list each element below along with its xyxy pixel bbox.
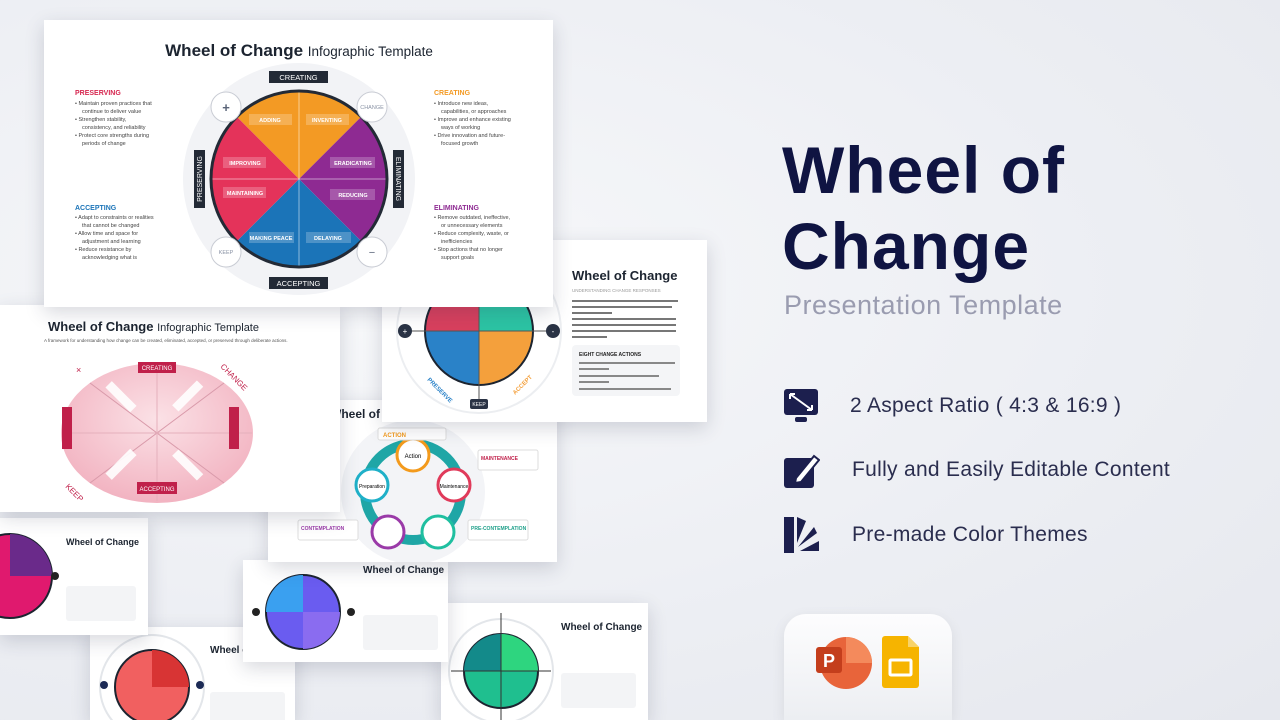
- quadrant wheel: +: [403, 327, 408, 336]
- text block: accepting: • Adapt to constraints or realities: [75, 215, 154, 221]
- text block: preserving: continue to deliver value: [82, 109, 141, 115]
- cycle diagram: Preparation: [359, 484, 385, 490]
- text block: eliminating: inefficiencies: [441, 239, 473, 245]
- pink wheel: CREATING: [142, 366, 173, 372]
- slide: stages of change cycle: Wheel of Change: [330, 407, 428, 421]
- wheel: IMPROVING: [229, 161, 261, 167]
- wheel: ADDING: [259, 118, 281, 124]
- slide: stages of change cycle: [268, 400, 557, 562]
- wheel: green: [449, 613, 553, 720]
- text block: accepting: • Allow time and space for: [75, 231, 138, 237]
- description: Wheel of Change: [572, 268, 677, 283]
- text block: accepting: [75, 205, 154, 261]
- icon: swatches: [784, 517, 819, 553]
- feature: editable: Fully and Easily Editable Content: [852, 458, 1170, 481]
- wheel: ERADICATING: [334, 161, 372, 167]
- wheel: blue: [252, 575, 355, 649]
- text block: preserving: PRESERVING: [75, 90, 121, 97]
- wheel: CHANGE: [360, 105, 384, 111]
- description: UNDERSTANDING CHANGE RESPONSES: [572, 288, 661, 293]
- title: Wheel of Change Infographic Template: [48, 319, 259, 334]
- text block: accepting: ACCEPTING: [75, 205, 117, 212]
- cycle diagram: [341, 420, 485, 564]
- text block: preserving: [75, 90, 152, 147]
- text block: eliminating: support goals: [441, 255, 474, 261]
- wheel: DELAYING: [314, 236, 342, 242]
- wheel: ELIMINATING: [394, 157, 401, 201]
- main heading: Change: [782, 209, 1030, 283]
- text block: creating: • Drive innovation and future-: [434, 133, 505, 139]
- quadrant wheel: [397, 249, 561, 413]
- icon: edit: [784, 454, 820, 488]
- wheel: INVENTING: [312, 118, 342, 124]
- description: [572, 268, 680, 396]
- cycle diagram: Action: [405, 454, 421, 460]
- text block: eliminating: ELIMINATING: [434, 205, 480, 212]
- quadrant wheel: ACCEPT: [512, 374, 534, 396]
- title: Wheel of Change: [66, 537, 139, 547]
- title: Wheel of Change: [210, 645, 292, 656]
- wheel: ACCEPTING: [277, 279, 321, 288]
- wheel: CREATING: [279, 73, 318, 82]
- text block: creating: CREATING: [434, 90, 471, 97]
- callouts: [378, 428, 446, 440]
- slide: magenta theme: [0, 518, 148, 635]
- slide: green theme: [441, 603, 648, 720]
- text block: creating: • Improve and enhance existing: [434, 117, 511, 123]
- wheel: [183, 63, 415, 295]
- text block: creating: focused growth: [441, 141, 478, 147]
- slide: pink wheel: [0, 305, 340, 512]
- text block: creating: [434, 90, 511, 147]
- quadrant wheel: KEEP: [472, 402, 486, 408]
- title: Wheel of Change Infographic Template: [165, 41, 433, 60]
- pink wheel: ×: [76, 365, 81, 375]
- text block: creating: ways of working: [440, 125, 480, 131]
- quadrant wheel: PRESERVE: [426, 377, 453, 404]
- slide: stages of change cycle: ACTION: [383, 433, 406, 439]
- text block: preserving: • Maintain proven practices that: [75, 101, 152, 107]
- card: app icons: [784, 614, 952, 720]
- pink wheel: KEEP: [64, 482, 85, 504]
- text block: accepting: • Reduce resistance by: [75, 247, 132, 253]
- main heading: Wheel of: [782, 133, 1065, 207]
- text block: creating: capabilities, or approaches: [441, 109, 507, 115]
- text block: accepting: acknowledging what is: [82, 255, 137, 261]
- title: Wheel of Change: [363, 565, 445, 576]
- title: Wheel of Change: [561, 622, 643, 633]
- wheel: REDUCING: [338, 193, 368, 199]
- slide: wheel of change with description: [382, 240, 707, 422]
- wheel: −: [369, 247, 375, 259]
- text block: preserving: • Strengthen stability,: [75, 117, 127, 123]
- slide: main infographic: [44, 20, 553, 307]
- text block: preserving: consistency, and reliability: [82, 125, 146, 131]
- wheel: KEEP: [219, 250, 234, 256]
- slide: stages of change cycle: PRE-CONTEMPLATION: [471, 526, 527, 532]
- text block: preserving: periods of change: [82, 141, 126, 147]
- feature: color themes: [784, 517, 1088, 553]
- wheel: MAKING PEACE: [250, 236, 293, 242]
- text block: eliminating: • Remove outdated, ineffective,: [434, 215, 511, 221]
- wheel: magenta: [0, 534, 59, 618]
- text block: eliminating: • Reduce complexity, waste, or: [434, 231, 509, 237]
- cycle diagram: Maintenance: [440, 484, 469, 490]
- pink wheel: ACCEPTING: [139, 487, 175, 493]
- text block: creating: • Introduce new ideas,: [434, 101, 489, 107]
- icon: powerpoint: P: [823, 651, 835, 671]
- feature: aspect ratio: [784, 389, 1121, 422]
- pink wheel: CHANGE: [219, 362, 249, 393]
- icon: powerpoint: [816, 637, 872, 689]
- text block: accepting: adjustment and learning: [82, 239, 141, 245]
- icon: monitor: [784, 389, 818, 422]
- text block: eliminating: or unnecessary elements: [441, 223, 503, 229]
- slide: stages of change cycle: CONTEMPLATION: [301, 526, 345, 532]
- feature: editable: [784, 454, 1170, 488]
- wheel: red: [100, 635, 204, 720]
- pink wheel: [61, 362, 253, 504]
- text block: preserving: • Protect core strengths during: [75, 133, 149, 139]
- slide: red theme: [90, 627, 295, 720]
- text block: accepting: that cannot be changed: [82, 223, 140, 229]
- text block: eliminating: [434, 205, 511, 261]
- slide: stages of change cycle: MAINTENANCE: [481, 456, 519, 462]
- slide: blue theme: [243, 560, 448, 662]
- text block: eliminating: • Stop actions that no longer: [434, 247, 503, 253]
- description: EIGHT CHANGE ACTIONS: [579, 352, 642, 358]
- icon: google slides: [882, 636, 919, 688]
- wheel: MAINTAINING: [227, 191, 263, 197]
- wheel: +: [222, 100, 230, 115]
- feature: aspect ratio: 2 Aspect Ratio ( 4:3 & 16:9 ): [850, 394, 1121, 417]
- subheading: Presentation Template: [784, 290, 1063, 320]
- main heading: [782, 133, 1065, 283]
- slide: pink wheel: A framework for understanding how change can be created, eliminated, accepted, or preserved through deliberate actions.: [44, 338, 288, 343]
- wheel: PRESERVING: [197, 156, 204, 202]
- feature: color themes: Pre-made Color Themes: [852, 523, 1088, 546]
- quadrant wheel: -: [552, 327, 555, 336]
